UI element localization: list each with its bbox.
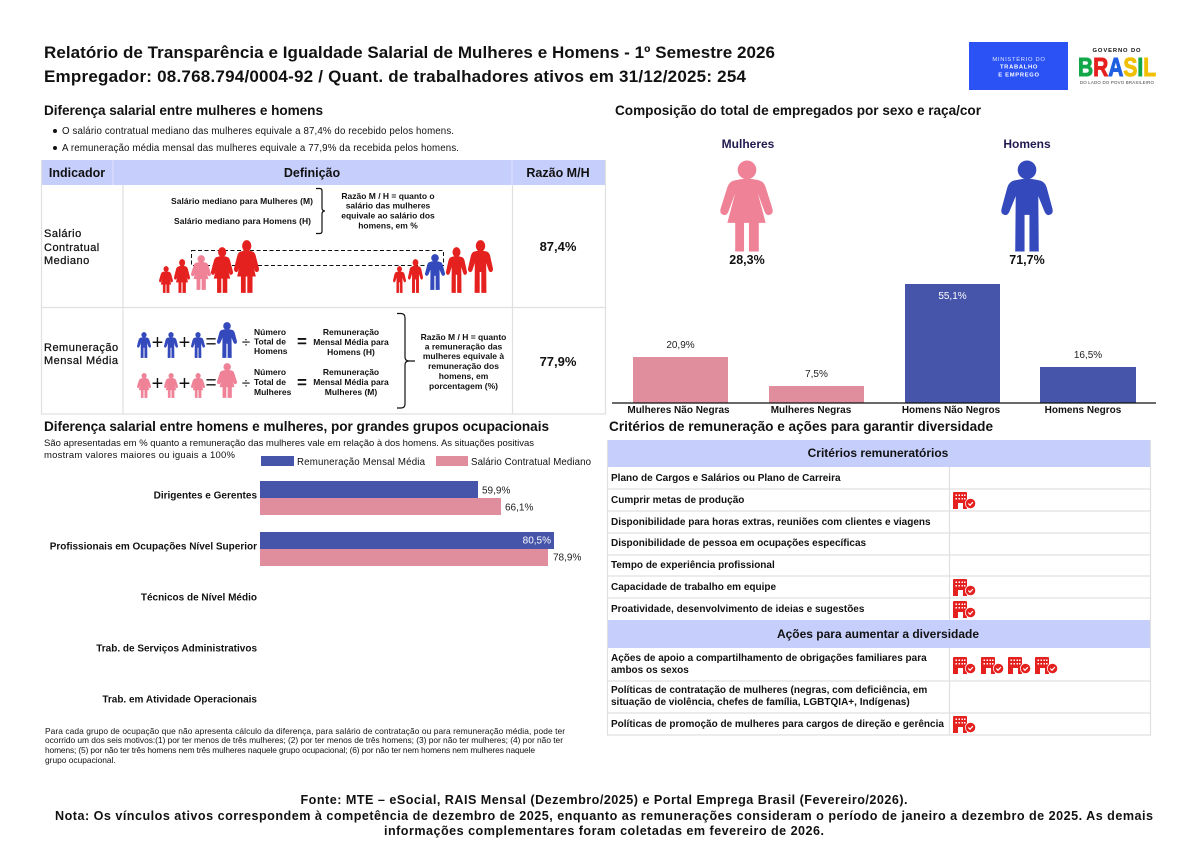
heading: critérios: Critérios de remuneração e ações para garantir diversidade <box>609 419 993 434</box>
criteria rows: Tempo de experiência profissional <box>611 560 775 571</box>
footer: source and note: informações complementares foram coletadas em fevereiro de 2026. <box>384 824 824 838</box>
formula: men average: = <box>205 332 217 353</box>
header: ações para aumentar a diversidade <box>607 620 1151 648</box>
title: Empregador: 08.768.794/0004-92 / Quant. de trabalhadores ativos em 31/12/2025: 254 <box>44 67 747 86</box>
formula: men average: Remuneração <box>323 327 379 337</box>
criteria rows: Cumprir metas de produção <box>611 495 744 506</box>
bar chart: occupational groups: Técnicos de Nível Médio <box>141 592 257 604</box>
brace and ratio definition: remuneração dos <box>428 361 499 371</box>
criteria rows: Proatividade, desenvolvimento de ideias e sugestões <box>611 604 865 615</box>
bar chart: composition by sex and race: 16,5% <box>1074 350 1102 361</box>
formula: women average: Remuneração <box>323 367 379 377</box>
heading: diferença por grupos ocupacionais: Diferença salarial entre homens e mulheres, por grandes grupos ocupacionais <box>44 419 549 434</box>
action rows <box>611 653 944 730</box>
legend <box>261 456 591 468</box>
bar chart: occupational groups: Trab. em Atividade Operacionais <box>102 694 257 706</box>
bar chart: occupational groups: Profissionais em Ocupações Nível Superior <box>50 542 257 552</box>
row label: remuneração mensal média <box>44 342 119 367</box>
criteria rows <box>611 473 931 615</box>
brace and ratio definition <box>397 314 506 408</box>
bar chart: composition by sex and race: Homens Não Negros <box>902 405 1001 416</box>
bar chart: composition by sex and race: 20,9% <box>666 340 695 351</box>
panel: men share <box>1001 137 1053 267</box>
formula: women average: Mulheres <box>254 387 292 397</box>
row label: salário contratual mediano: Contratual <box>44 242 100 254</box>
panel: women share: 28,3% <box>729 253 765 267</box>
footer: source and note: Fonte: MTE – eSocial, RAIS Mensal (Dezembro/2025) e Portal Emprega Brasil (Fevereiro/2026). <box>300 793 908 807</box>
criteria rows: Plano de Cargos e Salários ou Plano de Carreira <box>611 473 841 484</box>
table header: Razão M/H <box>526 166 590 180</box>
formula: women average: + <box>179 373 190 395</box>
brace and ratio definition: a remuneração das <box>425 342 503 352</box>
definition: salário mediano labels and brace: Salário mediano para Homens (H) <box>174 216 311 226</box>
row label: remuneração mensal média: Mensal Média <box>44 355 119 367</box>
bar chart: occupational groups <box>50 481 581 706</box>
text block: footnote on missing groups: ocorrido um dos seis motivos:(1) por ter menos de três mulheres; (2) por ter menos de três homens; (3) por não ter mulheres; (4) por não ter <box>45 735 563 745</box>
legend: Remuneração Mensal Média <box>297 457 426 468</box>
action rows: ambos os sexos <box>611 665 689 676</box>
formula: men average: Mensal Média para <box>313 337 389 347</box>
bar chart: composition by sex and race: Mulheres Não Negras <box>627 405 730 416</box>
formula: women average: ÷ <box>242 375 250 392</box>
formula: men average <box>137 322 389 358</box>
formula: men average: = <box>297 332 307 351</box>
logo: Governo do Brasil: DO LADO DO POVO BRASILEIRO <box>1080 80 1155 85</box>
icons: men ranked by salary <box>393 241 493 293</box>
row label: remuneração mensal média: Remuneração <box>44 342 119 354</box>
criteria rows: Disponibilidade para horas extras, reuniões com clientes e viagens <box>611 517 931 528</box>
formula: women average: Mensal Média para <box>313 377 389 387</box>
action rows: situação de violência, chefes de família, LGBTQIA+, Indígenas) <box>611 697 910 708</box>
value: 77,9%: 77,9% <box>540 354 577 369</box>
formula: women average: Total de <box>254 377 286 387</box>
logo: Ministério do Trabalho e Emprego: MINISTÉRIO DO <box>992 56 1046 63</box>
definition: salário mediano labels and brace: homens, em % <box>358 220 418 230</box>
definition: salário mediano labels and brace <box>171 188 435 234</box>
brace and ratio definition: homens, em <box>439 371 489 381</box>
criteria rows: Disponibilidade de pessoa em ocupações específicas <box>611 538 867 549</box>
panel: women share <box>720 137 775 267</box>
table header: Indicador <box>49 166 105 180</box>
table header <box>41 160 606 185</box>
definition: salário mediano labels and brace: Razão M / H = quanto o <box>341 191 435 201</box>
header: critérios remuneratórios <box>607 440 1151 467</box>
text block: salary summary bullets <box>53 126 459 154</box>
bar chart: occupational groups: 78,9% <box>553 552 581 564</box>
icons: company with check marks <box>953 492 1058 733</box>
formula: men average: Total de <box>254 336 286 346</box>
value: 87,4%: 87,4% <box>540 239 577 254</box>
text block: footnote on missing groups: Para cada grupo de ocupação que não apresenta cálculo da diferença, para salário de contratação ou para remuneração média, pode ter <box>45 726 565 736</box>
definition: salário mediano labels and brace: equivale ao salário dos <box>341 210 435 220</box>
row label: salário contratual mediano: Salário <box>44 228 82 240</box>
text block: salary summary bullets: A remuneração média mensal das mulheres equivale a 77,9% da recebida pelos homens. <box>62 143 459 154</box>
legend: Salário Contratual Mediano <box>471 457 591 468</box>
footer: source and note: Nota: Os vínculos ativos correspondem à competência de dezembro de 2025, enquanto as remunerações consideram o período de janeiro a dezembro de 2025. As demais <box>55 809 1153 823</box>
panel: women share: Mulheres <box>722 137 775 151</box>
brace and ratio definition: porcentagem (%) <box>429 381 498 391</box>
formula: women average: = <box>205 373 217 394</box>
text block: chart explanation <box>44 438 534 461</box>
formula: men average: Homens (H) <box>327 347 375 357</box>
action rows: Políticas de promoção de mulheres para cargos de direção e gerência <box>611 719 944 730</box>
text block: footnote on missing groups: grupo ocupacional. <box>45 755 116 765</box>
formula: men average: + <box>179 332 190 354</box>
formula: men average: Número <box>254 327 286 337</box>
logo: Ministério do Trabalho e Emprego: E EMPREGO <box>998 72 1040 78</box>
bar chart: occupational groups: 66,1% <box>505 502 533 514</box>
icons: women ranked by salary <box>159 241 259 293</box>
formula: men average: + <box>152 332 163 354</box>
logo: Governo do Brasil: GOVERNO DO <box>1093 48 1141 54</box>
panel: men share: Homens <box>1003 137 1051 151</box>
panel: indicator table <box>41 160 606 414</box>
header: critérios remuneratórios: Critérios remuneratórios <box>808 446 949 460</box>
formula: women average: Número <box>254 367 286 377</box>
formula: women average: = <box>297 373 307 392</box>
header: ações para aumentar a diversidade: Ações para aumentar a diversidade <box>777 627 979 641</box>
bar chart: composition by sex and race: 55,1% <box>938 291 967 302</box>
heading: composição: Composição do total de empregados por sexo e raça/cor <box>615 103 982 118</box>
footer: source and note <box>55 793 1153 838</box>
formula: women average: Mulheres (M) <box>325 387 377 397</box>
row label: salário contratual mediano <box>44 228 100 267</box>
bar chart: composition by sex and race: Homens Negros <box>1045 405 1122 416</box>
text block: footnote on missing groups: homens; (5) por não ter três homens nem três mulheres naquele grupo ocupacional; (6) por não ter nem homens nem mulheres naquele <box>45 745 535 755</box>
action rows: Políticas de contratação de mulheres (negras, com deficiência, em <box>611 685 927 696</box>
row label: salário contratual mediano: Mediano <box>44 255 90 267</box>
definition: salário mediano labels and brace: Salário mediano para Mulheres (M) <box>171 196 313 206</box>
text block: chart explanation: São apresentadas em % quanto a remuneração das mulheres vale em relação à dos homens. As situações positivas <box>44 438 534 449</box>
action rows: Ações de apoio a compartilhamento de obrigações familiares para <box>611 653 927 664</box>
bar chart: composition by sex and race: Mulheres Negras <box>771 405 852 416</box>
bar chart: occupational groups: Trab. de Serviços Administrativos <box>96 644 257 654</box>
title: Relatório de Transparência e Igualdade Salarial de Mulheres e Homens - 1º Semestre 2026 <box>44 43 775 62</box>
panel: men share: 71,7% <box>1009 253 1045 267</box>
bar chart: occupational groups: 80,5% <box>523 536 551 546</box>
brace and ratio definition: mulheres equivale à <box>423 351 504 361</box>
definition: salário mediano labels and brace: salário das mulheres <box>346 200 431 210</box>
bar chart: occupational groups: Dirigentes e Gerentes <box>154 490 257 502</box>
formula: women average: + <box>152 373 163 395</box>
panel: criteria table <box>607 440 1151 735</box>
dashed comparison box <box>192 250 444 266</box>
formula: men average: ÷ <box>242 334 250 351</box>
text block: salary summary bullets: O salário contratual mediano das mulheres equivale a 87,4% do recebido pelos homens. <box>62 126 454 137</box>
bar chart: composition by sex and race: 7,5% <box>805 369 828 380</box>
bar chart: occupational groups: 59,9% <box>482 486 510 496</box>
logo: Ministério do Trabalho e Emprego <box>969 42 1068 90</box>
text block: chart explanation: mostram valores maiores ou iguais a 100% <box>44 450 236 461</box>
text block: footnote on missing groups <box>45 726 565 765</box>
table header: Definição <box>284 166 340 180</box>
bar chart: composition by sex and race <box>612 284 1156 416</box>
logo: Ministério do Trabalho e Emprego: TRABALHO <box>1000 64 1038 70</box>
heading: diferença salarial: Diferença salarial entre mulheres e homens <box>44 103 323 118</box>
formula: men average: Homens <box>254 346 288 356</box>
brace and ratio definition: Razão M / H = quanto <box>421 332 506 342</box>
formula: women average <box>137 363 389 398</box>
criteria rows: Capacidade de trabalho em equipe <box>611 582 776 593</box>
logo: Governo do Brasil: BRASIL <box>1078 52 1156 82</box>
title <box>44 43 775 86</box>
